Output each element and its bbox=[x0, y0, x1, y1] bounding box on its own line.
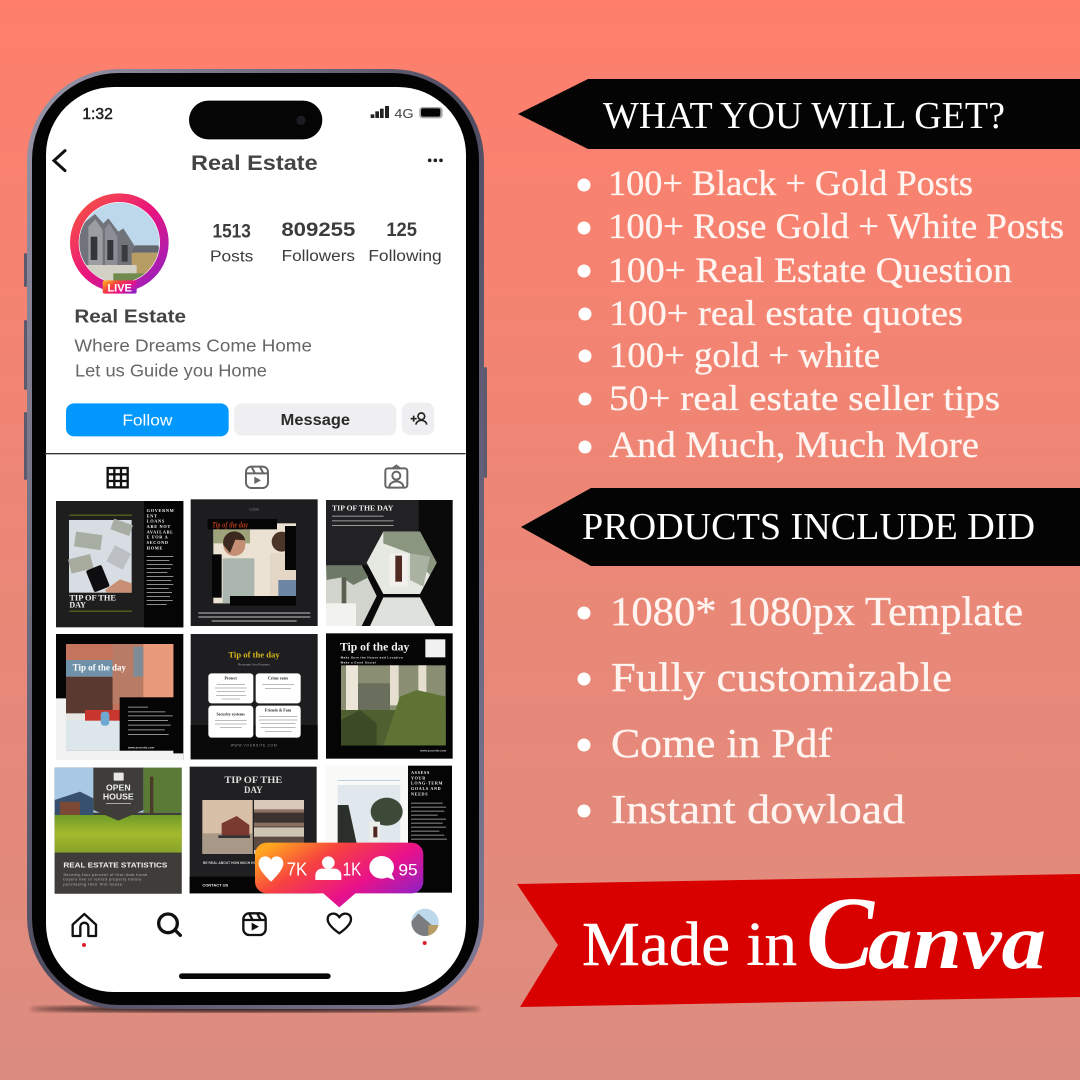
post 9: assess goals: YOUR bbox=[411, 775, 426, 780]
post 1: government loans bbox=[56, 501, 183, 627]
post 2: couple photo bbox=[191, 499, 318, 626]
post 3: hexagon tip bbox=[326, 500, 453, 626]
icon: heart bbox=[259, 856, 283, 882]
ribbon: products include: PRODUCTS INCLUDE DID bbox=[582, 506, 1035, 548]
post 9: assess goals: LONG-TERM bbox=[411, 781, 443, 786]
list: what you will get: And Much, Much More bbox=[609, 425, 979, 466]
profile stats bbox=[210, 220, 442, 265]
list: what you will get: 100+ Black + Gold Posts bbox=[608, 163, 973, 203]
more menu bbox=[428, 158, 443, 162]
followers count: 1K bbox=[343, 858, 362, 879]
post 1: government loans: LOANS bbox=[147, 519, 165, 524]
profile stats: 1513 bbox=[212, 221, 251, 242]
post 1: government loans: ARE NOT bbox=[147, 524, 171, 529]
post 2: couple photo: Tip of the day bbox=[212, 520, 248, 529]
profile stats: Posts bbox=[210, 248, 254, 265]
avatar with live ring bbox=[74, 198, 164, 295]
post 9: assess goals: GOALS AND bbox=[411, 786, 441, 791]
post 8: tip of the day landscape: DAY bbox=[244, 785, 263, 795]
icon: profile thumbnail bbox=[410, 908, 440, 945]
icon: search bbox=[159, 914, 180, 935]
banner: made in canva bbox=[517, 874, 1080, 1007]
post 1: government loans: HOME bbox=[147, 545, 163, 550]
likes count: 7K bbox=[287, 858, 308, 879]
profile stats: Following bbox=[368, 248, 442, 265]
post 8: tip of the day landscape: BE REAL ABOUT HOW MUCH HOME bbox=[203, 861, 262, 865]
profile screen top bbox=[45, 101, 466, 488]
add friend button bbox=[402, 403, 434, 435]
back arrow bbox=[54, 151, 65, 171]
bio: Let us Guide you Home bbox=[75, 361, 267, 381]
ribbon: products include bbox=[521, 488, 1080, 566]
post 6: building with palms bbox=[326, 633, 453, 759]
list: products include: 1080* 1080px Template bbox=[610, 588, 1023, 634]
post 8: tip of the day landscape: CONTACT US bbox=[202, 883, 228, 888]
avatar with live ring: LIVE bbox=[107, 283, 132, 295]
post 7: open house: OPEN bbox=[106, 783, 131, 793]
post 6: building with palms: Tip of the day bbox=[340, 641, 410, 653]
message button: Message bbox=[281, 412, 350, 429]
post 7: open house: buyers live in rented property before bbox=[63, 878, 142, 882]
tab icon: tagged bbox=[385, 466, 407, 488]
post 1: government loans: GOVERNM bbox=[147, 508, 174, 513]
post 9: assess goals: NEEDS bbox=[411, 791, 428, 796]
list: products include: Instant dowload bbox=[611, 786, 905, 832]
post 4: couple legs bbox=[56, 634, 183, 760]
list: products include bbox=[578, 588, 1023, 832]
post 1: government loans: TIP OF THE bbox=[69, 594, 116, 603]
post 1: government loans: ENT bbox=[147, 513, 158, 518]
post 4: couple legs: Tip of the day bbox=[73, 662, 126, 672]
list: what you will get bbox=[578, 163, 1064, 466]
post 6: building with palms: Make Sure the House and Location bbox=[341, 656, 403, 660]
post 5: tips cards: Protect bbox=[225, 676, 237, 681]
post 1: government loans: DAY bbox=[69, 600, 86, 609]
message button bbox=[234, 403, 396, 436]
bottom nav and notification bbox=[73, 843, 440, 979]
banner: made in canva: C bbox=[806, 876, 876, 991]
post 4: couple legs: www.yoursite.com bbox=[127, 745, 155, 749]
list: what you will get: 100+ gold + white bbox=[609, 335, 880, 375]
post 7: open house: HOUSE bbox=[103, 791, 134, 801]
post 5: tips cards: Security systems bbox=[217, 712, 245, 717]
follow button: Follow bbox=[122, 412, 173, 429]
bio: Where Dreams Come Home bbox=[74, 335, 312, 355]
post 9: assess goals: ASSESS bbox=[411, 770, 430, 775]
post 7: open house: Seventy-four percent of first-time home bbox=[63, 873, 148, 877]
ribbon: what you will get: WHAT YOU WILL GET? bbox=[603, 95, 1005, 137]
post 7: open house: purchasing their first house. bbox=[63, 883, 124, 887]
list: what you will get: 50+ real estate seller tips bbox=[609, 378, 1000, 418]
icon: person bbox=[315, 856, 341, 880]
post 1: government loans: AVAILABL bbox=[147, 529, 174, 534]
icon: comment bubble bbox=[369, 856, 395, 880]
icon: reels bbox=[243, 913, 266, 935]
icon: home bbox=[73, 914, 96, 947]
post 1: government loans: SECOND bbox=[147, 540, 169, 545]
banner: made in canva: Made in bbox=[582, 911, 797, 979]
tab icon: grid bbox=[108, 468, 128, 487]
comments count: 95 bbox=[398, 860, 418, 879]
phone mockup bbox=[24, 69, 487, 1012]
post 1: government loans: E FOR A bbox=[147, 535, 169, 540]
bio bbox=[74, 306, 312, 381]
post 5: tips cards: Renovate Your Property bbox=[238, 662, 270, 666]
home indicator bbox=[179, 973, 331, 979]
list: products include: Come in Pdf bbox=[611, 720, 832, 766]
post 5: tips cards bbox=[191, 634, 318, 759]
icon: heart outline bbox=[328, 914, 351, 933]
post 8: tip of the day landscape bbox=[190, 767, 317, 893]
post grid bbox=[55, 499, 453, 894]
list: what you will get: 100+ Real Estate Question bbox=[608, 250, 1012, 290]
post 7: open house bbox=[55, 768, 182, 894]
profile stats: Followers bbox=[282, 248, 355, 265]
post 5: tips cards: Tip of the day bbox=[228, 650, 280, 659]
ribbon: what you will get bbox=[518, 79, 1080, 149]
tab icon: reels bbox=[246, 467, 268, 488]
post 5: tips cards: WWW.YOURSITE.COM bbox=[231, 743, 277, 747]
status bar bbox=[82, 101, 443, 139]
post 9: assess goals bbox=[325, 766, 452, 893]
profile stats: 125 bbox=[386, 220, 417, 241]
post 6: building with palms: www.yoursite.com bbox=[419, 749, 447, 753]
status bar: 4G bbox=[394, 106, 414, 121]
account title: Real Estate bbox=[191, 150, 318, 175]
list: products include: Fully customizable bbox=[611, 654, 952, 700]
banner: made in canva: anva bbox=[868, 898, 1046, 985]
status bar: 1:32 bbox=[82, 106, 113, 123]
post 3: hexagon tip: TIP OF THE DAY bbox=[332, 504, 394, 513]
post 7: open house: REAL ESTATE STATISTICS bbox=[63, 862, 168, 869]
post 5: tips cards: Friends & Fam bbox=[265, 707, 292, 712]
bio: Real Estate bbox=[74, 306, 186, 327]
post 8: tip of the day landscape: TIP OF THE bbox=[224, 775, 282, 785]
post 6: building with palms: Make a Good Social bbox=[341, 661, 376, 665]
post 2: couple photo: LOGO bbox=[250, 508, 260, 512]
notification badge bbox=[255, 843, 423, 907]
list: what you will get: 100+ real estate quotes bbox=[609, 293, 963, 333]
follow button bbox=[66, 403, 229, 436]
profile stats: 809255 bbox=[281, 220, 356, 241]
post 5: tips cards: Crime rates bbox=[268, 676, 289, 681]
list: what you will get: 100+ Rose Gold + White Posts bbox=[608, 206, 1064, 246]
